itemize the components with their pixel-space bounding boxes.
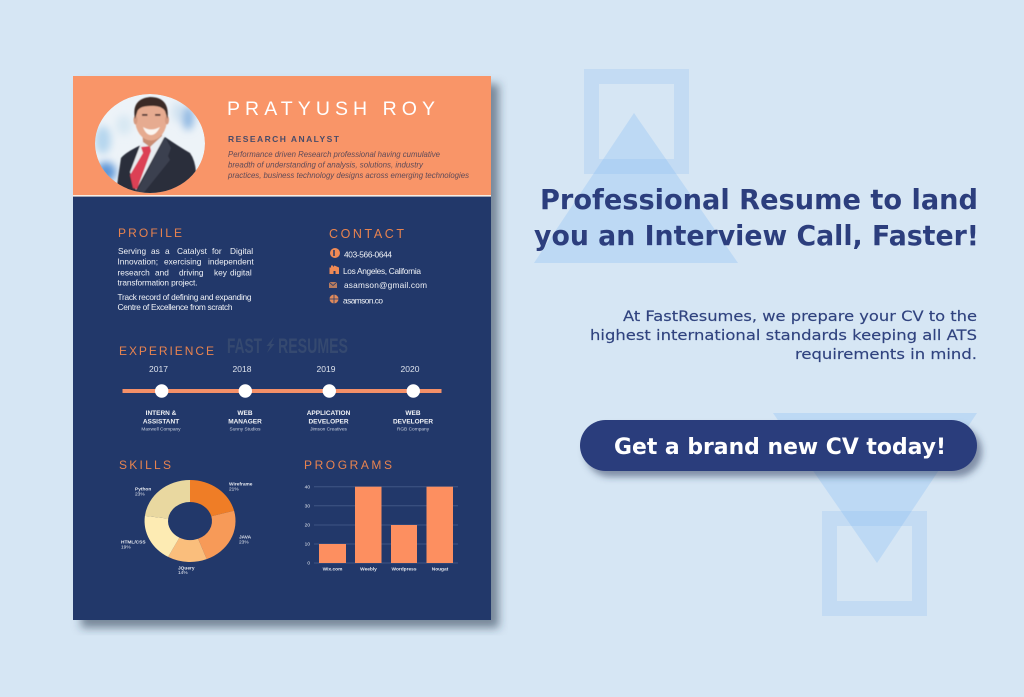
timeline years [149, 364, 420, 374]
profile text: as [151, 246, 160, 256]
donut labels: 23% [239, 540, 249, 546]
donut labels: 14% [178, 570, 188, 576]
profile text: independent [208, 256, 254, 266]
role: web developer: WEB [405, 410, 421, 417]
profile text: transformation project. [118, 278, 198, 288]
role: intern: INTERN & [146, 410, 177, 417]
profile text: Catalyst [177, 246, 208, 256]
donut labels: 19% [121, 544, 131, 550]
category labels: Wix.com [323, 566, 342, 572]
decorative shapes: bottom square and triangle [773, 413, 977, 616]
category labels: Nougat [432, 566, 449, 572]
summary text: practices, business technology designs across emerging technologies [227, 170, 469, 180]
description text: requirements in mind. [795, 347, 977, 363]
axis labels: 0 [307, 561, 310, 567]
portrait photo [95, 94, 205, 195]
profile text: Digital [230, 246, 253, 256]
category labels [323, 566, 449, 572]
profile text: and [155, 268, 169, 278]
role: application developer: APPLICATION [307, 410, 351, 417]
role: web developer: RGB Company [397, 426, 430, 432]
eyes [142, 114, 148, 116]
name: PRATYUSH ROY [227, 98, 435, 120]
donut labels: JAVA [239, 534, 252, 540]
call to action button: Get a brand new CV today! [614, 434, 946, 460]
phone number: 403-566-0644 [344, 250, 392, 260]
headline [534, 183, 979, 252]
icon: home [330, 266, 339, 274]
role: web manager: WEB [237, 410, 253, 417]
description text: At FastResumes, we prepare your CV to the [623, 309, 977, 325]
job title: RESEARCH ANALYST [228, 134, 340, 144]
icon: phone [330, 248, 340, 258]
role: intern [141, 410, 181, 432]
role: application developer: DEVELOPER [308, 418, 349, 426]
donut labels: 23% [135, 492, 145, 498]
donut chart [121, 480, 253, 576]
address: Los Angeles, California [343, 266, 421, 276]
watermark logo [227, 335, 348, 358]
donut labels: Python [135, 486, 151, 492]
role: web manager [228, 410, 262, 432]
headline: Professional Resume to land [540, 183, 978, 216]
website: asamson.co [343, 296, 383, 306]
watermark logo: RESUMES [278, 335, 348, 358]
category labels: Weebly [360, 566, 377, 572]
profile text: for [212, 246, 222, 256]
axis labels: 40 [305, 484, 310, 490]
donut labels: Wireframe [229, 482, 253, 488]
profile text: Serving [118, 246, 147, 256]
donut labels: JQuery [178, 566, 195, 572]
timeline dots [155, 384, 420, 398]
profile text: Track record of defining and expanding [118, 292, 252, 302]
profile text: digital [230, 268, 252, 278]
headline: you an Interview Call, Faster! [534, 219, 979, 252]
programs heading: PROGRAMS [304, 458, 392, 472]
resume card [73, 76, 491, 620]
experience heading: EXPERIENCE [119, 344, 214, 358]
donut labels [121, 482, 253, 576]
profile text: research [118, 268, 150, 278]
profile text [118, 246, 254, 312]
timeline years: 2019 [317, 364, 336, 374]
axis labels: 30 [305, 504, 310, 510]
role: web developer [393, 410, 433, 432]
category labels: Wordpress [392, 566, 417, 572]
bars [319, 487, 453, 563]
resume body panel [73, 76, 491, 620]
axis labels [305, 484, 310, 567]
summary text: Performance driven Research professional having cumulative [228, 149, 440, 159]
profile text: Innovation; [118, 256, 158, 266]
axis labels: 20 [305, 523, 310, 529]
contact heading: CONTACT [329, 227, 404, 241]
neck [142, 134, 162, 147]
icon: mail [329, 282, 337, 288]
role: intern: Maxwell Company [141, 426, 181, 432]
contact list [329, 248, 427, 306]
axis labels: 10 [305, 542, 310, 548]
icon: globe [330, 294, 338, 304]
smile [143, 127, 160, 135]
timeline [122, 364, 442, 432]
role: web developer: DEVELOPER [393, 418, 433, 426]
profile text: exercising [164, 256, 202, 266]
tie [130, 146, 151, 189]
role: application developer: Jimson Creatives [310, 426, 347, 432]
description text [590, 309, 977, 363]
shirt [130, 133, 165, 190]
timeline years: 2018 [233, 364, 252, 374]
profile text: Centre of Excellence from scratch [118, 302, 233, 312]
timeline years: 2017 [149, 364, 168, 374]
suit [116, 137, 200, 195]
ears [134, 116, 138, 124]
email: asamson@gmail.com [344, 280, 427, 290]
role: web manager: MANAGER [228, 418, 262, 426]
call to action button [580, 420, 977, 471]
summary text: breadth of understanding of analysis, solutions, industry [228, 160, 424, 170]
timeline bar [122, 389, 442, 393]
profile text: key [214, 268, 228, 278]
resume header band [73, 76, 491, 197]
watermark logo: FAST [227, 335, 262, 358]
role: application developer [307, 410, 351, 432]
role: intern: ASSISTANT [143, 418, 179, 426]
summary text [227, 149, 469, 180]
profile heading: PROFILE [118, 226, 182, 240]
description text: highest international standards keeping all ATS [590, 328, 977, 344]
donut labels: HTML/CSS [121, 540, 146, 546]
profile text: driving [179, 268, 204, 278]
hair [134, 97, 168, 119]
skills heading: SKILLS [119, 458, 171, 472]
bar chart [305, 484, 458, 572]
donut labels: 21% [229, 486, 239, 492]
lapel highlight [137, 138, 171, 192]
decorative shapes: top square and triangle [534, 69, 738, 263]
face [135, 105, 167, 141]
profile text: a [165, 246, 170, 256]
timeline years: 2020 [401, 364, 420, 374]
role: web manager: Sunny Studios [230, 426, 261, 432]
